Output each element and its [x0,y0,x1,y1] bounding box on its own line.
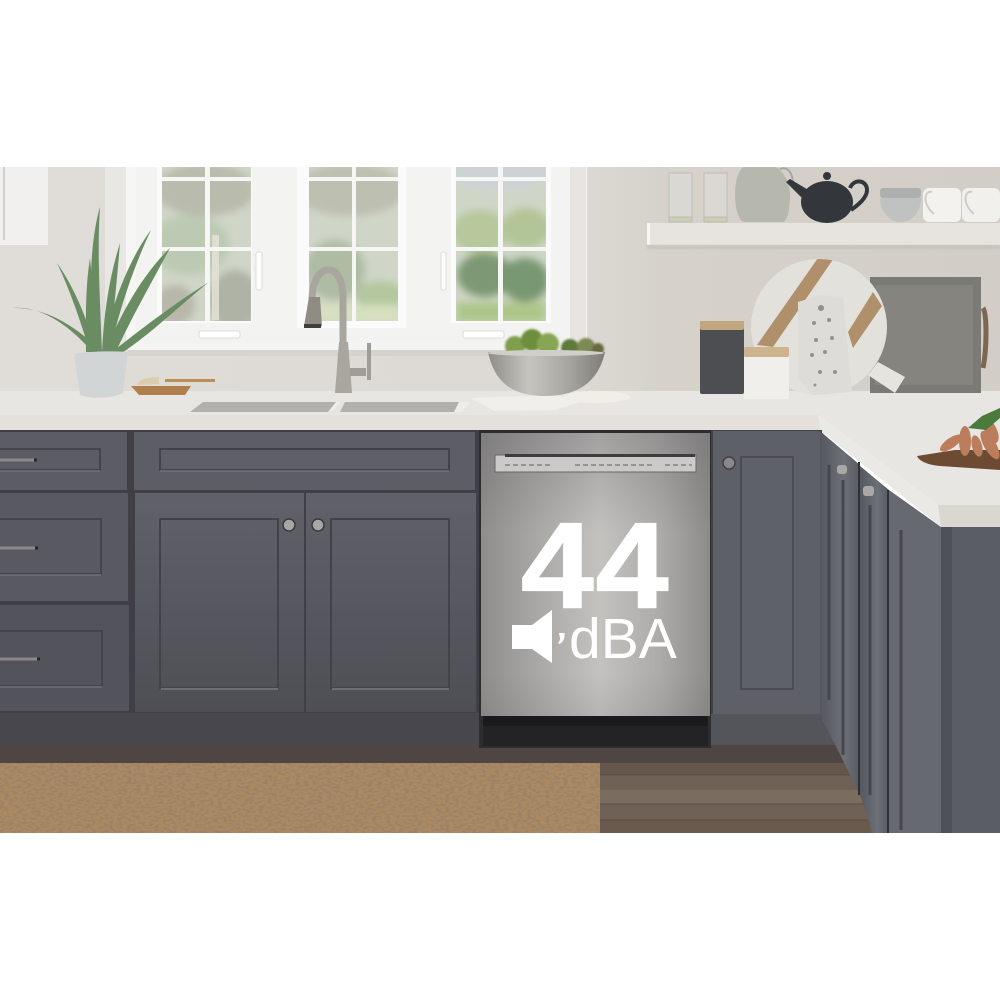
shelf [647,223,1000,249]
countertop [0,391,1000,527]
side door inset panels [829,465,901,830]
drawer pulls [0,460,40,659]
rug [0,763,600,833]
plant pot [74,351,128,398]
unit dBA: dBA [569,607,677,671]
white canister [744,347,789,399]
shelf jug [735,167,793,222]
cutting board with carrots [917,408,1000,470]
backsplash ledge shadow [128,350,578,356]
gray tray [870,277,986,393]
sink [190,402,470,412]
side handles [837,465,874,496]
shelf glasses [669,173,727,222]
colander with greens [488,329,605,396]
control panel [495,454,696,472]
towel and plate [470,391,630,411]
window latches [199,252,504,338]
angled side cabinets [820,431,1000,833]
dishwasher [479,430,711,748]
door knobs [283,519,324,531]
window muntins [162,167,546,321]
small speckled board [798,295,852,395]
wall [0,167,1000,407]
window view foliage [162,167,546,321]
brush and dish [131,377,215,395]
dark canister [700,321,744,394]
toe panel [483,716,708,746]
floor [0,745,880,833]
right cabinet door [710,430,836,745]
round marble board [751,258,905,395]
faucet [304,270,371,393]
left cabinet base [0,430,482,745]
window [105,161,587,350]
left drawers [0,432,129,711]
upper cabinet [0,167,48,245]
44 dBA label [512,497,677,671]
floor boards [600,775,880,820]
right door [306,493,476,712]
top center drawer [134,432,475,490]
bowls and mugs [880,188,1000,222]
left door [135,493,304,712]
aloe plant [12,207,209,398]
number 44: 44 [521,497,670,634]
toe kick [0,713,482,745]
teapot [786,172,867,223]
icon: speaker [512,610,552,663]
sound wave mark [558,633,565,644]
